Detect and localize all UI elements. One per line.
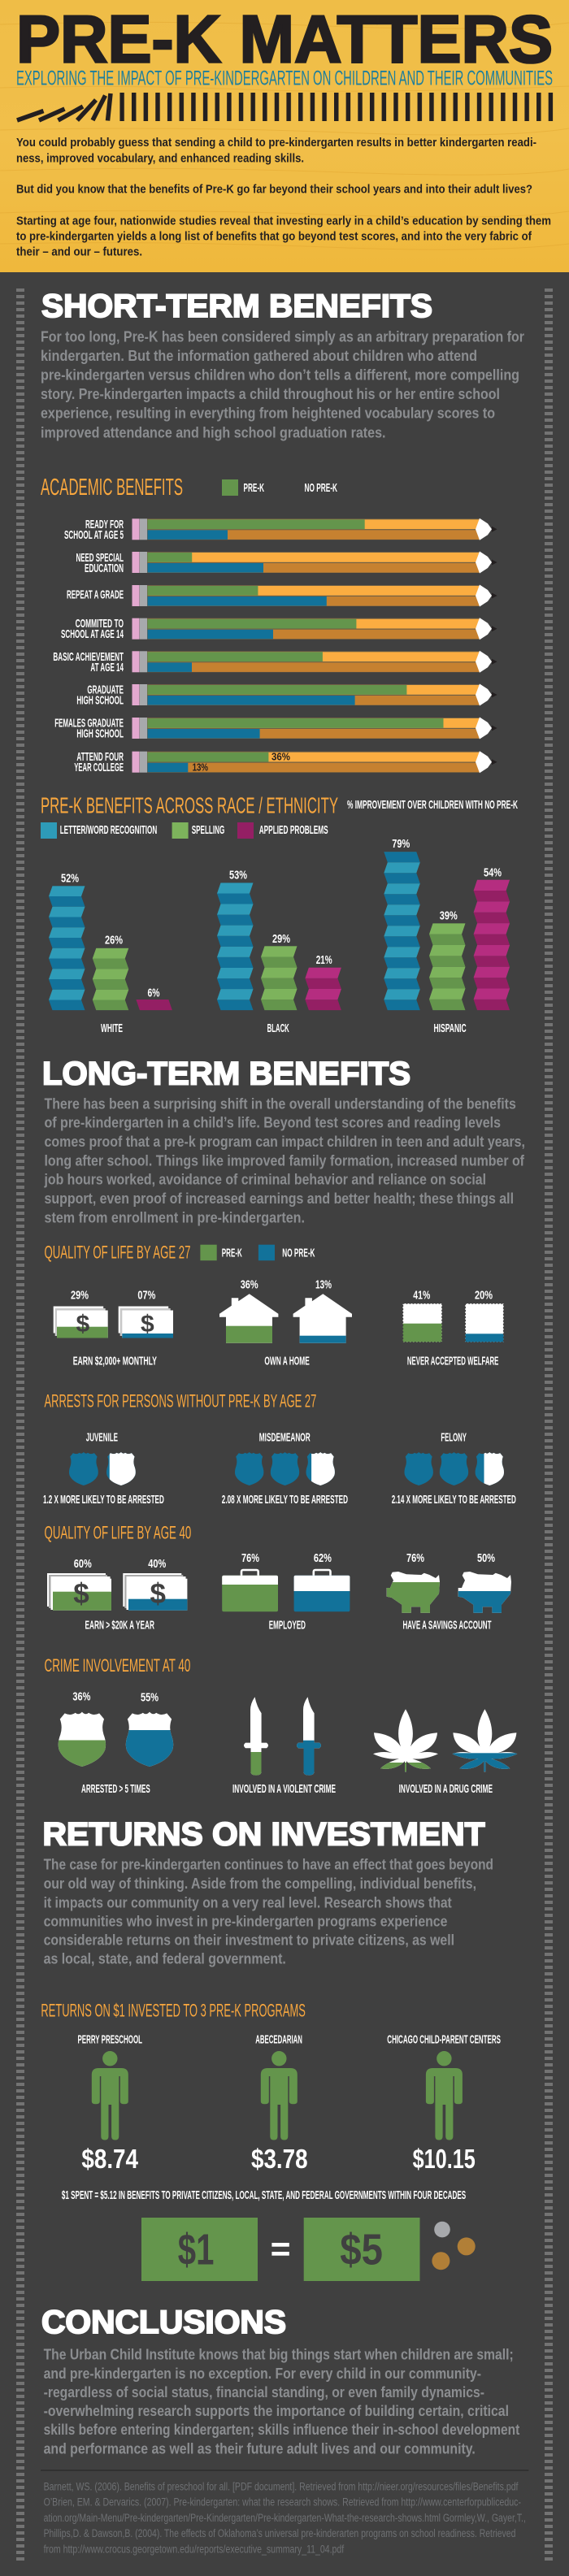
text: conclusions: -regardless of social status, financial standing, or even family dynamics- xyxy=(44,2383,484,2400)
graphic: $1 equals $5: $5 xyxy=(340,2225,383,2274)
heading: academic benefits: ACADEMIC BENEFITS xyxy=(41,475,183,501)
group: white: WHITE xyxy=(101,1021,123,1035)
group: black: 21% xyxy=(316,954,332,967)
labels: crime: ARRESTED > 5 TIMES xyxy=(81,1782,150,1796)
group: white: 6% xyxy=(148,987,160,1000)
heading: returns on $1: RETURNS ON $1 INVESTED TO 3 PRE-K PROGRAMS xyxy=(41,2001,306,2021)
labels: age 27: OWN A HOME xyxy=(264,1354,310,1368)
icon group: misdemeanor badges: 2.08 X MORE LIKELY TO BE ARRESTED xyxy=(222,1493,348,1507)
labels: crime xyxy=(81,1782,493,1796)
text: returns intro: The case for pre-kindergarten continues to have an effect that goes beyond xyxy=(44,1856,493,1873)
text: returns intro: as local, state, and federal government. xyxy=(44,1950,286,1967)
icon: houses own a home: 13% xyxy=(315,1278,332,1291)
text: returns intro xyxy=(44,1856,493,1967)
panel: yellow header xyxy=(0,0,569,272)
text: short-term intro: kindergarten. But the information gathered about children who attend xyxy=(41,347,477,364)
icon: badges arrested: 36% xyxy=(72,1690,90,1703)
pencil row: basic achievement: AT AGE 14 xyxy=(90,661,124,674)
legend: age 27: NO PRE-K xyxy=(282,1247,315,1260)
heading: conclusions: CONCLUSIONS xyxy=(41,2305,286,2340)
text: returns intro: it impacts our community on a very real level. Research shows that xyxy=(44,1893,452,1910)
heading: race / ethnicity: PRE-K BENEFITS ACROSS RACE / ETHNICITY xyxy=(41,793,338,818)
legend: academic benefits: PRE-K xyxy=(244,481,264,495)
icon: briefcases employed: 76% xyxy=(241,1552,259,1565)
program: perry preschool xyxy=(78,2033,142,2174)
pencil row: basic achievement xyxy=(53,650,497,674)
text: long-term intro: stem from enrollment in pre-kindergarten. xyxy=(44,1208,305,1225)
labels: age 27 xyxy=(73,1354,498,1368)
icon: piggy banks savings xyxy=(386,1552,513,1615)
graphic: $1 equals $5 xyxy=(141,2218,476,2281)
text: short-term intro: experience, resulting in everything from heightened vocabulary scores to xyxy=(41,405,495,422)
group: black: 29% xyxy=(272,933,290,946)
pencil row: special education: NEED SPECIAL xyxy=(76,551,124,565)
heading: short-term benefits: SHORT-TERM BENEFITS xyxy=(41,288,432,324)
labels: age 27: EARN $2,000+ MONTHLY xyxy=(73,1354,157,1368)
labels: age 40: EARN > $20K A YEAR xyxy=(85,1618,154,1632)
pencil row: commited to school xyxy=(61,617,497,641)
program: abecedarian: ABECEDARIAN xyxy=(255,2033,302,2047)
text: conclusions: and pre-kindergarten is no exception. For every child in our community- xyxy=(44,2365,481,2382)
text: conclusions xyxy=(44,2346,519,2457)
heading: long-term benefits: LONG-TERM BENEFITS xyxy=(42,1056,410,1092)
icon group: felony badges: FELONY xyxy=(441,1430,467,1444)
icon: stamps never accepted welfare: 41% xyxy=(413,1289,430,1302)
pencil row: graduate high school: HIGH SCHOOL xyxy=(76,694,124,707)
icon: stamps never accepted welfare xyxy=(403,1289,504,1342)
pencil row: four year college: 36% xyxy=(271,751,290,763)
icon group: juvenile badges: 1.2 X MORE LIKELY TO BE ARRESTED xyxy=(43,1493,164,1507)
text: conclusions: and performance as well as their future adult lives and our community. xyxy=(44,2439,476,2457)
heading: crime involvement: CRIME INVOLVEMENT AT 40 xyxy=(44,1655,190,1676)
legend: race chart: SPELLING xyxy=(192,823,224,837)
icon: money earn > $20k: $ xyxy=(150,1578,166,1610)
heading: quality of life by age 27: QUALITY OF LIFE BY AGE 27 xyxy=(44,1242,190,1262)
group: white: 26% xyxy=(105,935,123,948)
icon: piggy banks savings: 76% xyxy=(406,1552,424,1565)
program: abecedarian: $3.78 xyxy=(251,2144,308,2174)
text: returns intro: our old way of thinking. Aside from the compelling, individual benefits, xyxy=(44,1875,476,1892)
pencil row: females graduate: HIGH SCHOOL xyxy=(76,726,124,741)
text: references: from http://www.crocus.georgetown.edu/reports/executive_summary_11_04.pdf xyxy=(44,2543,344,2555)
text: long-term intro: of pre-kindergarten in a child’s life. Beyond test scores and reading levels xyxy=(44,1114,501,1131)
icon: houses own a home xyxy=(219,1278,352,1343)
icon group: misdemeanor badges: MISDEMEANOR xyxy=(259,1430,311,1444)
pencil row: ready for school: READY FOR xyxy=(85,518,124,531)
intro text: their – and our – futures. xyxy=(16,245,142,258)
icon group: juvenile badges xyxy=(43,1430,164,1507)
group: white: 52% xyxy=(61,873,79,886)
pencil row: basic achievement: BASIC ACHIEVEMENT xyxy=(53,650,124,664)
chart: academic benefits pencils xyxy=(53,518,497,774)
group: hispanic: 79% xyxy=(392,838,410,851)
legend: academic benefits xyxy=(222,479,337,496)
group: black: BLACK xyxy=(267,1021,289,1035)
program: chicago child-parent centers: $10.15 xyxy=(413,2144,476,2174)
icon: money earn > $20k: 60% xyxy=(74,1558,92,1571)
pencil row: graduate high school xyxy=(76,683,497,707)
heading: returns on investment: RETURNS ON INVESTMENT xyxy=(42,1817,484,1853)
icon: stamps never accepted welfare: 20% xyxy=(475,1289,493,1302)
group: white xyxy=(49,874,172,1032)
pencil row: repeat a grade xyxy=(67,585,497,606)
program: perry preschool: $8.74 xyxy=(81,2144,139,2174)
icon group: felony badges xyxy=(392,1430,516,1507)
pencil row: females graduate xyxy=(54,717,497,741)
text: returns intro: communities who invest in pre-kindergarten programs experience xyxy=(44,1912,447,1929)
pencil row: special education: EDUCATION xyxy=(85,562,124,575)
icon: money earn $2,000+ xyxy=(54,1289,173,1338)
icon: badges arrested: 55% xyxy=(141,1691,159,1704)
heading: quality of life by age 40: QUALITY OF LIFE BY AGE 40 xyxy=(44,1523,191,1543)
text: short-term intro xyxy=(41,328,524,440)
pencil row: ready for school xyxy=(64,518,497,542)
icon: briefcases employed xyxy=(222,1552,350,1611)
icon: falling dominoes xyxy=(17,93,553,121)
legend: academic benefits: NO PRE-K xyxy=(304,481,337,495)
intro text xyxy=(16,136,551,258)
pencil row: repeat a grade: REPEAT A GRADE xyxy=(67,588,124,601)
pencil row: four year college xyxy=(74,750,497,774)
icon: knives violent crime xyxy=(241,1697,324,1776)
legend: age 27 xyxy=(200,1245,315,1260)
pencil row: graduate high school: GRADUATE xyxy=(87,683,124,697)
text: short-term intro: improved attendance and high school graduation rates. xyxy=(41,423,385,440)
pencil row: females graduate: FEMALES GRADUATE xyxy=(54,717,124,730)
text: long-term intro: job hours worked, avoidance of criminal behavior and reliance on social xyxy=(44,1171,486,1188)
icon: money earn $2,000+: $ xyxy=(141,1311,154,1338)
icon: piggy banks savings: 50% xyxy=(477,1552,495,1565)
pencil row: ready for school: SCHOOL AT AGE 5 xyxy=(64,528,124,542)
group: hispanic: HISPANIC xyxy=(434,1021,467,1035)
text: short-term intro: story. Pre-kindergarten impacts a child throughout his or her entire school xyxy=(41,385,500,402)
icon group: misdemeanor badges xyxy=(222,1430,348,1507)
group: hispanic xyxy=(384,836,510,1035)
labels: age 40 xyxy=(85,1618,491,1632)
icon: money earn $2,000+: $ xyxy=(76,1311,89,1338)
icon: badges arrested xyxy=(57,1690,175,1767)
group: hispanic: 39% xyxy=(440,910,458,923)
legend: age 27: PRE-K xyxy=(222,1247,242,1260)
icon: money earn > $20k xyxy=(47,1558,187,1611)
program: perry preschool: PERRY PRESCHOOL xyxy=(78,2033,142,2047)
text: references xyxy=(44,2480,526,2555)
icon: money earn $2,000+: 29% xyxy=(71,1289,89,1302)
heading: arrests: ARRESTS FOR PERSONS WITHOUT PRE-K BY AGE 27 xyxy=(44,1391,316,1412)
chart: race bars xyxy=(49,836,510,1035)
legend: race chart: APPLIED PROBLEMS xyxy=(259,823,328,837)
intro text: ness, improved vocabulary, and enhanced reading skills. xyxy=(16,151,304,165)
labels: age 40: EMPLOYED xyxy=(269,1618,306,1632)
icon: leaves drug crime xyxy=(372,1709,518,1772)
pencil row: four year college: YEAR COLLEGE xyxy=(74,761,124,774)
icon: money earn > $20k: $ xyxy=(73,1578,89,1610)
text: returns intro: considerable returns on their investment to private citizens, as well xyxy=(44,1931,454,1948)
pencil row: commited to school: SCHOOL AT AGE 14 xyxy=(61,627,124,641)
graphic: $1 equals $5: $1 xyxy=(178,2225,214,2274)
program: chicago child-parent centers xyxy=(387,2033,501,2174)
text: long-term intro xyxy=(44,1095,525,1225)
icon: money earn > $20k: 40% xyxy=(148,1558,166,1571)
program: abecedarian xyxy=(251,2033,308,2174)
group: black: 53% xyxy=(229,870,247,883)
icon: houses own a home: 36% xyxy=(241,1278,258,1291)
group: black xyxy=(217,871,341,1032)
labels: crime: INVOLVED IN A DRUG CRIME xyxy=(399,1782,493,1796)
pencil row: commited to school: COMMITED TO xyxy=(76,617,124,631)
pencil row: four year college: 13% xyxy=(193,761,208,774)
legend: race chart xyxy=(41,822,328,839)
labels: crime: INVOLVED IN A VIOLENT CRIME xyxy=(232,1782,336,1796)
icon: briefcases employed: 62% xyxy=(314,1552,332,1565)
labels: age 40: HAVE A SAVINGS ACCOUNT xyxy=(403,1618,491,1632)
pencil row: four year college: ATTEND FOUR xyxy=(76,750,124,764)
legend: race chart: LETTER/WORD RECOGNITION xyxy=(60,823,157,837)
pencil row: special education xyxy=(76,551,497,575)
group: hispanic: 54% xyxy=(484,866,502,879)
icon: money earn $2,000+: 07% xyxy=(137,1289,155,1302)
icon group: juvenile badges: JUVENILE xyxy=(86,1430,118,1444)
title: PRE-K MATTERS xyxy=(16,2,553,76)
